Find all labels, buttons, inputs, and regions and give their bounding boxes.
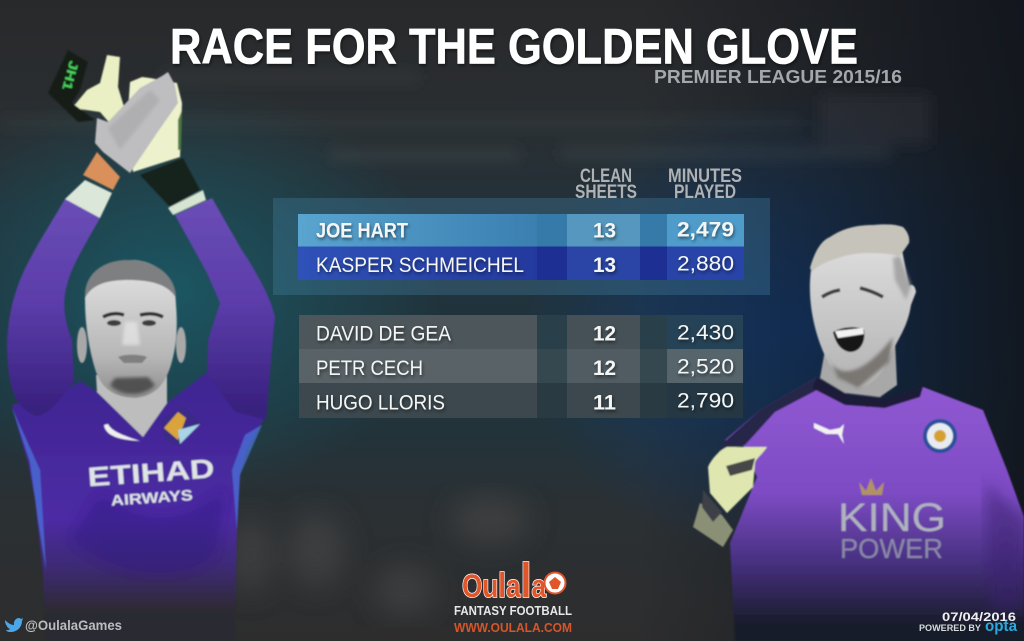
Joe Hart stats: 13 [593, 220, 616, 242]
David De Gea stats: 12 [593, 322, 616, 346]
arm right [175, 198, 275, 420]
glove [693, 447, 767, 547]
title: RACE FOR THE GOLDEN GLOVE [170, 18, 858, 74]
arm left [7, 199, 100, 416]
Petr Cech stats [316, 356, 734, 380]
panel: other keepers [299, 315, 743, 418]
head [77, 260, 186, 398]
row: Kasper Schmeichel background [298, 246, 744, 280]
neck [96, 375, 167, 437]
panel: top two highlight [273, 198, 770, 295]
oulala logo [454, 555, 572, 635]
king power logo: POWER [840, 533, 943, 564]
David De Gea stats [316, 322, 734, 346]
David De Gea stats: 2,430 [677, 322, 734, 344]
table text [316, 218, 734, 414]
head [810, 224, 916, 388]
king power logo [838, 478, 946, 564]
etihad logo [87, 454, 215, 510]
column header: minutes played [668, 166, 742, 203]
date and credit: POWERED BY [919, 623, 982, 634]
Hugo Lloris stats [316, 390, 734, 414]
Kasper Schmeichel stats: KASPER SCHMEICHEL [316, 254, 524, 277]
shirt [725, 377, 1024, 641]
left hand [65, 72, 178, 218]
column header: clean sheets: SHEETS [575, 182, 637, 203]
oulala logo: Oulala [462, 555, 546, 608]
date and credit [919, 610, 1017, 635]
subtitle: PREMIER LEAGUE 2015/16 [654, 67, 902, 87]
column header: clean sheets: CLEAN [580, 166, 632, 187]
nike logo [104, 424, 140, 441]
player: Joe Hart [7, 50, 275, 640]
Hugo Lloris stats: 11 [593, 392, 616, 414]
Hugo Lloris stats: 2,790 [677, 390, 734, 412]
icon: football [544, 572, 566, 594]
Kasper Schmeichel stats: 2,880 [677, 252, 734, 276]
Petr Cech stats: 12 [593, 357, 616, 380]
wrist strap JH1: JH1 [59, 59, 82, 92]
Petr Cech stats: PETR CECH [316, 357, 423, 380]
etihad logo: AIRWAYS [110, 487, 193, 510]
neck [820, 340, 897, 397]
date and credit: 07/04/2016 [942, 610, 1016, 624]
Hugo Lloris stats: HUGO LLORIS [316, 392, 445, 414]
leicester crest [923, 419, 957, 453]
David De Gea stats: DAVID DE GEA [316, 322, 451, 346]
player: Kasper Schmeichel [693, 224, 1024, 641]
oulala logo: FANTASY FOOTBALL [454, 603, 572, 618]
twitter handle: @OulalaGames [25, 617, 122, 633]
wrist tape [83, 152, 120, 190]
Joe Hart stats: 2,479 [677, 218, 734, 242]
column header: clean sheets [575, 166, 637, 203]
Kasper Schmeichel stats: 13 [593, 254, 616, 277]
Petr Cech stats: 2,520 [677, 356, 734, 378]
Joe Hart stats [316, 218, 734, 242]
icon: twitter bird [5, 618, 23, 632]
column header: minutes played: MINUTES [668, 166, 742, 187]
glove right hand [128, 77, 206, 215]
oulala logo: WWW.OULALA.COM [454, 620, 572, 635]
Kasper Schmeichel stats [316, 252, 734, 277]
etihad logo: ETIHAD [87, 454, 215, 492]
glove upper [48, 50, 125, 127]
torso shirt [12, 372, 267, 640]
column header: minutes played: PLAYED [674, 182, 736, 203]
city crest [161, 406, 201, 446]
king power logo: KING [838, 496, 946, 540]
row: Joe Hart background [298, 214, 744, 246]
Joe Hart stats: JOE HART [316, 220, 408, 242]
puma logo [814, 423, 844, 444]
date and credit: opta [985, 618, 1017, 635]
